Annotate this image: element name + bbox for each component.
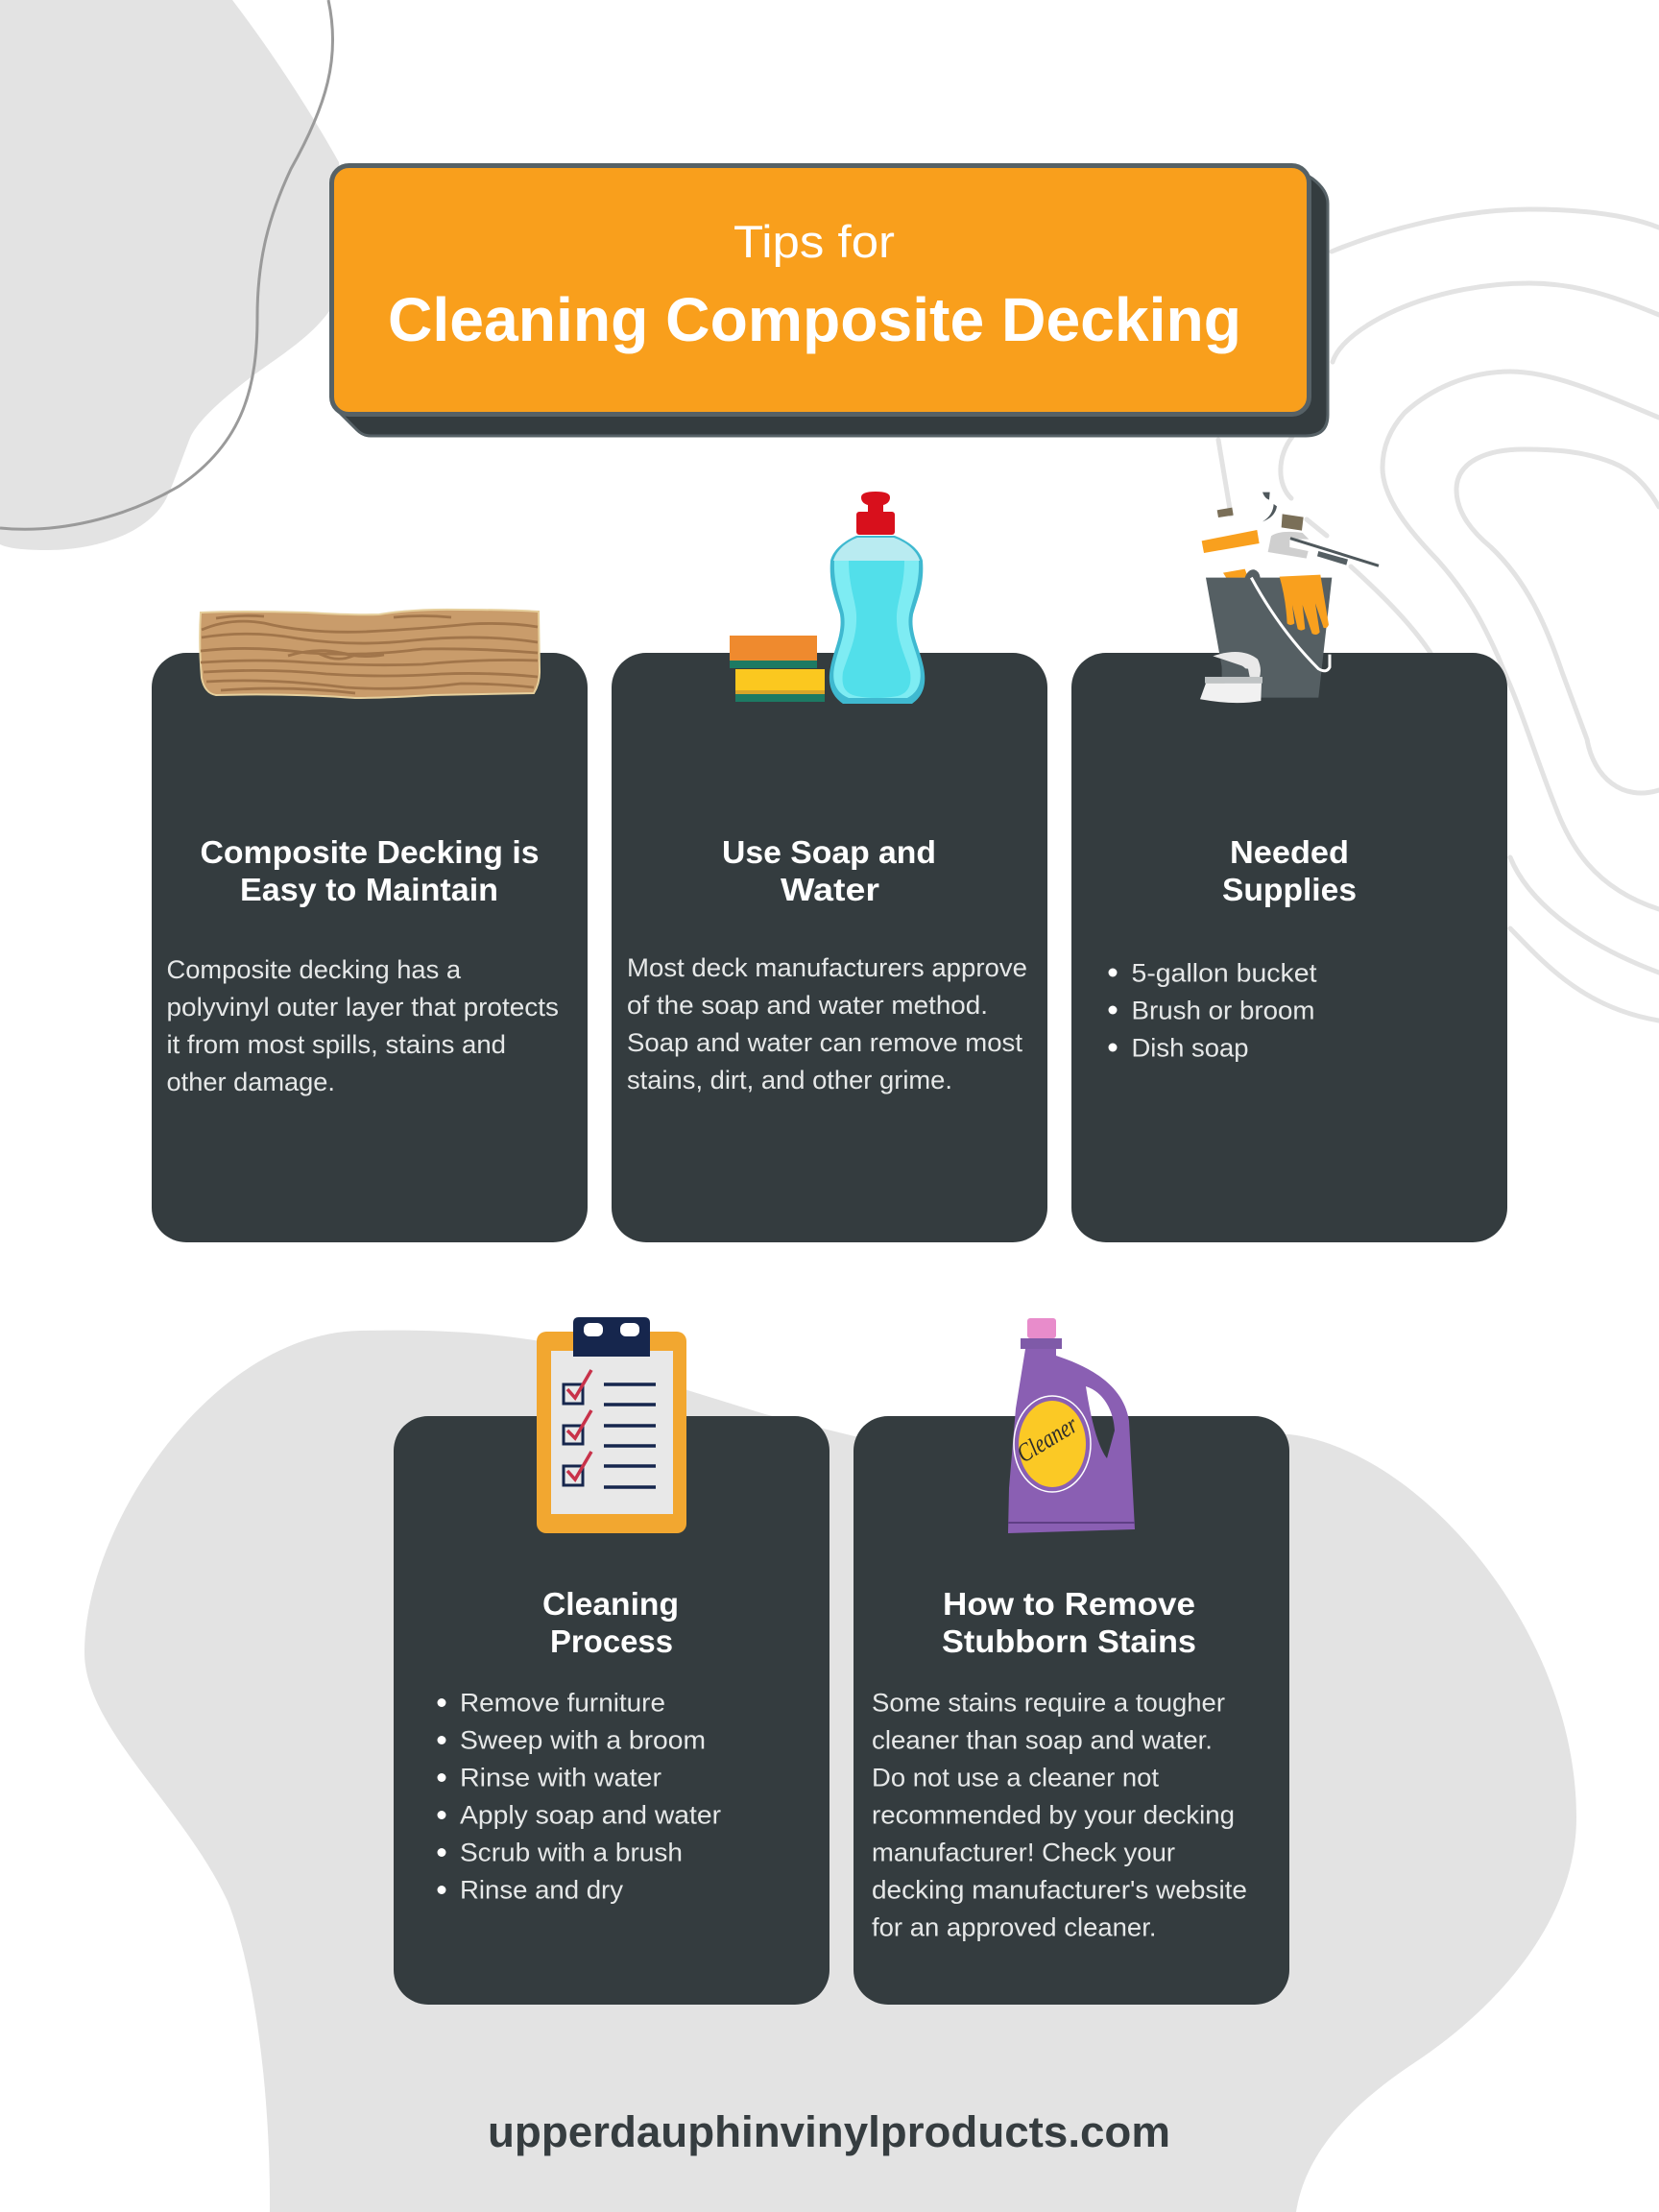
- bullet list: 5-gallon bucket: [1131, 958, 1317, 987]
- banner shadow: [340, 165, 1328, 436]
- heading: [1222, 834, 1357, 907]
- banner panel: [332, 165, 1310, 415]
- title banner: [332, 165, 1328, 436]
- body text: [627, 953, 1027, 1094]
- body text: Composite decking has a: [167, 955, 462, 984]
- panel: cleaning process: [394, 1317, 830, 2005]
- background blob: top left: [0, 0, 350, 550]
- heading: Composite Decking is: [200, 834, 540, 870]
- bullet list: Brush or broom: [1131, 997, 1315, 1025]
- icon: sponges: [730, 636, 825, 702]
- bullet list: [438, 1688, 721, 1905]
- panel: use soap and water: [612, 492, 1047, 1242]
- label text: Cleaner: [1012, 1409, 1083, 1468]
- bullet list: Rinse and dry: [460, 1876, 624, 1905]
- body text: it from most spills, stains and: [167, 1030, 506, 1059]
- heading: Needed: [1230, 834, 1349, 870]
- heading: [722, 834, 936, 907]
- bullet list: [1108, 958, 1317, 1062]
- bullet list: Scrub with a brush: [460, 1838, 683, 1866]
- body text: Most deck manufacturers approve: [627, 953, 1027, 982]
- body text: [167, 955, 559, 1096]
- background outline: top left curve: [0, 0, 333, 529]
- heading: Stubborn Stains: [942, 1623, 1196, 1659]
- heading: [200, 834, 540, 907]
- icon: clipboard checklist: [537, 1317, 686, 1533]
- body text: stains, dirt, and other grime.: [627, 1066, 952, 1094]
- body text: polyvinyl outer layer that protects: [167, 993, 559, 1022]
- body text: manufacturer! Check your: [872, 1838, 1175, 1866]
- icon: cleaner bottle: [1008, 1318, 1135, 1533]
- bullet list: Rinse with water: [460, 1763, 661, 1791]
- panel: how to remove stubborn stains: [854, 1318, 1289, 2005]
- panel: needed supplies: [1071, 493, 1507, 1242]
- body text: other damage.: [167, 1068, 335, 1096]
- body text: [872, 1688, 1247, 1941]
- heading: [542, 1586, 679, 1659]
- background blob: bottom: [84, 1331, 1576, 2212]
- heading: Cleaning: [542, 1586, 679, 1622]
- body text: cleaner than soap and water.: [872, 1726, 1213, 1755]
- heading: [942, 1586, 1196, 1659]
- banner kicker: Tips for: [733, 216, 895, 267]
- footer website: upperdauphinvinylproducts.com: [488, 2107, 1170, 2156]
- heading: How to Remove: [943, 1586, 1195, 1622]
- body text: Some stains require a tougher: [872, 1688, 1225, 1717]
- heading: Use Soap and: [722, 834, 936, 870]
- body text: of the soap and water method.: [627, 991, 988, 1020]
- icon: wood plank: [200, 610, 540, 698]
- body text: Do not use a cleaner not: [872, 1763, 1159, 1791]
- icon: dish soap bottle: [830, 492, 925, 704]
- heading: Water: [781, 872, 879, 907]
- bullet list: Remove furniture: [460, 1688, 665, 1717]
- icon: bucket with supplies: [1200, 493, 1379, 703]
- bullet list: Apply soap and water: [460, 1801, 721, 1830]
- background contour lines: right: [1218, 209, 1659, 1021]
- heading: Supplies: [1222, 872, 1357, 907]
- bullet list: Sweep with a broom: [460, 1726, 706, 1755]
- body text: Soap and water can remove most: [627, 1028, 1022, 1057]
- bullet list: Dish soap: [1131, 1033, 1248, 1062]
- heading: Process: [550, 1623, 673, 1659]
- panel: composite decking is easy to maintain: [152, 610, 588, 1242]
- heading: Easy to Maintain: [240, 872, 498, 907]
- body text: decking manufacturer's website: [872, 1876, 1247, 1905]
- banner heading: Cleaning Composite Decking: [388, 285, 1241, 354]
- body text: for an approved cleaner.: [872, 1912, 1156, 1941]
- body text: recommended by your decking: [872, 1801, 1235, 1830]
